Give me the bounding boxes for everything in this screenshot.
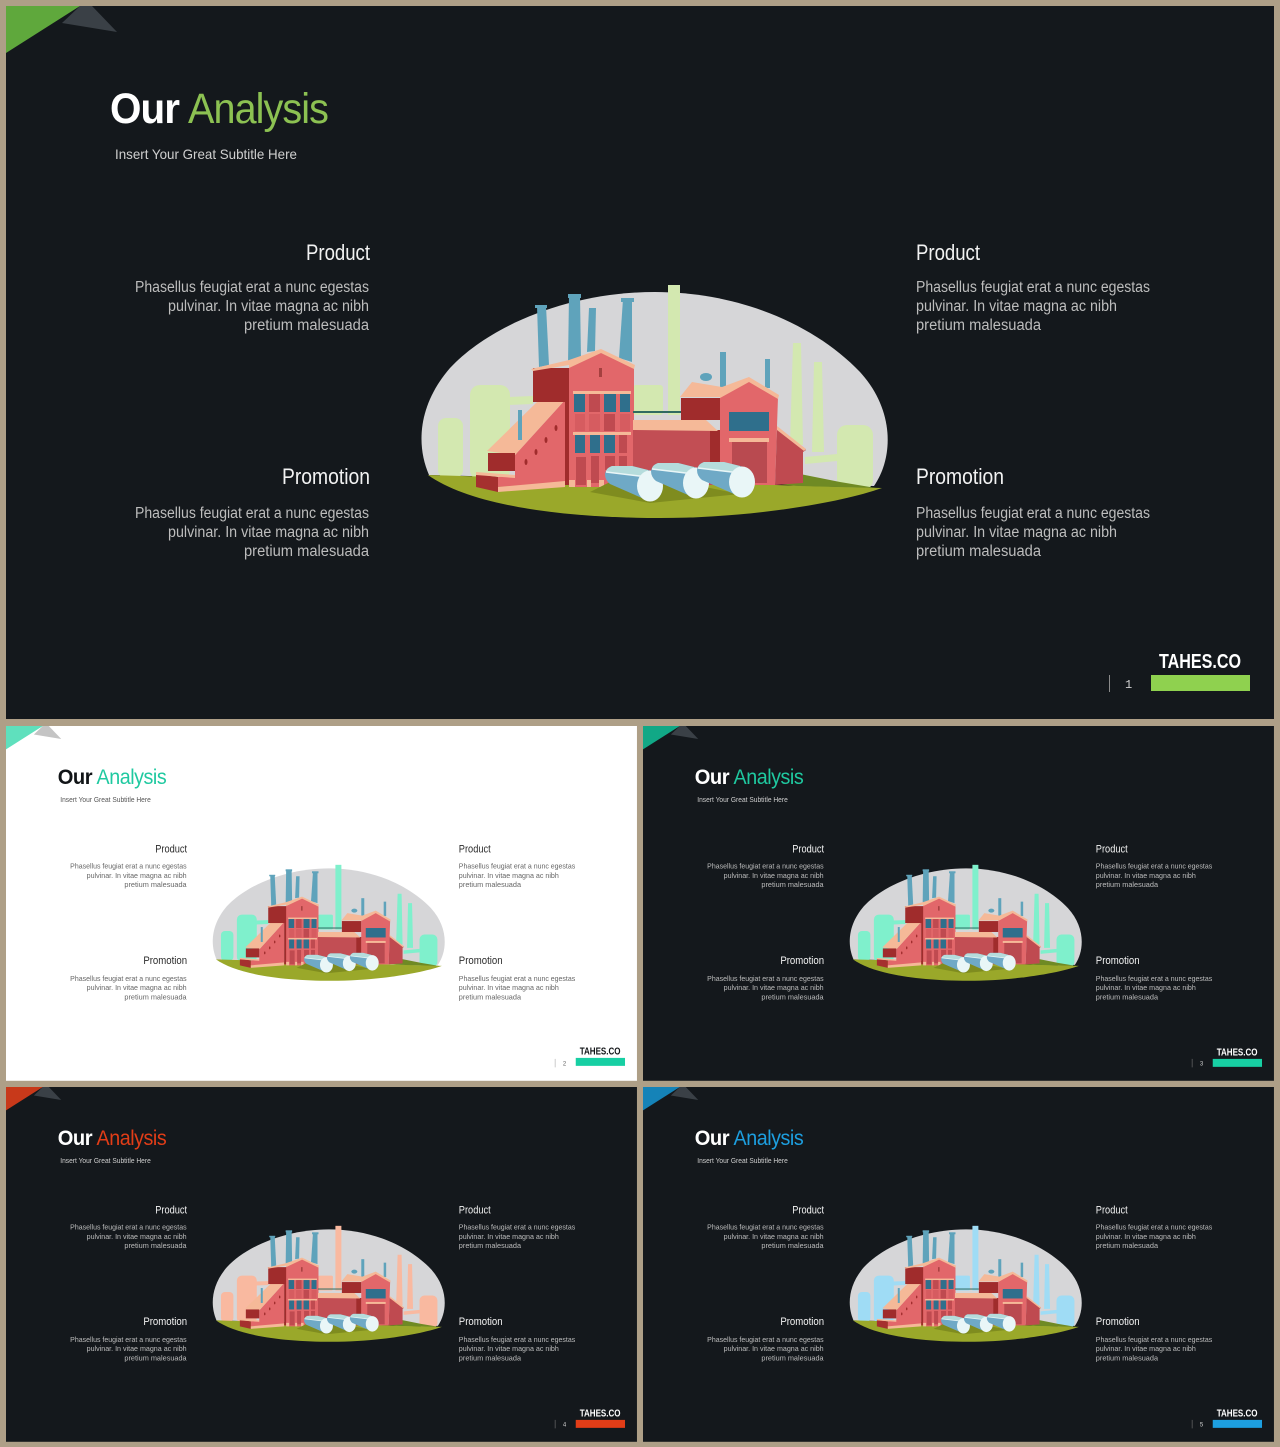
slide 2: small white teal slide [6,726,637,1081]
text block: promotion left: Phasellus feugiat erat a nunc egestas [70,974,187,983]
text block: product left: Product [155,843,187,855]
text block: promotion right [1096,1316,1212,1363]
title: Analysis [97,1126,166,1150]
left wing [476,400,565,492]
text block: promotion left: Phasellus feugiat erat a nunc egestas [135,505,369,522]
footer: divider and page number: 2 [563,1060,567,1067]
footer: divider and page number: 3 [1200,1060,1204,1067]
tanks [590,462,755,503]
text block: product right: Product [1096,843,1128,855]
title: Our [695,1126,729,1150]
footer: divider and page number [1109,675,1132,692]
text block: product right: pretium malesuada [459,1241,522,1250]
text block: promotion left: Promotion [282,464,370,489]
text block: product right [1096,1204,1212,1250]
text block: promotion left: pulvinar. In vitae magna ac nibh [724,983,824,992]
title: Analysis [97,765,166,789]
text block: product left: pretium malesuada [124,880,187,889]
text block: product left [707,1204,824,1250]
footer: accent bar [1213,1059,1262,1067]
background silhouettes [438,285,873,490]
text block: promotion left: pretium malesuada [124,1354,187,1363]
text block: promotion right: Promotion [916,464,1004,489]
text block: product right: Phasellus feugiat erat a nunc egestas [459,1222,575,1231]
text block: promotion right: pulvinar. In vitae magna ac nibh [1096,983,1196,992]
text block: promotion right: Phasellus feugiat erat a nunc egestas [459,974,575,983]
text block: promotion left: Promotion [780,955,824,967]
text block: product left: pulvinar. In vitae magna ac nibh [87,871,187,880]
text block: promotion left: pretium malesuada [124,993,187,1002]
text block: product left: pulvinar. In vitae magna ac nibh [87,1232,187,1241]
text block: product right: pretium malesuada [1096,1241,1159,1250]
footer: accent bar [1213,1420,1262,1428]
text block: product left: pulvinar. In vitae magna ac nibh [724,1232,824,1241]
text block: product right: Phasellus feugiat erat a nunc egestas [1096,1222,1212,1231]
corner triangle: accent [6,726,43,749]
text block: product left: pretium malesuada [761,1241,824,1250]
footer: divider and page number [1192,1420,1204,1428]
slide 5: small dark blue slide [643,1087,1274,1442]
text block: promotion right: Promotion [1096,955,1140,967]
text block: product left [70,1204,187,1250]
slide background [6,726,637,1081]
factory illustration [213,865,445,981]
footer: accent bar [1151,675,1250,691]
text block: product right: Product [459,1204,491,1216]
text block: product left [707,843,824,889]
text block: promotion right: pretium malesuada [1096,1354,1159,1363]
slide 4: small dark red slide [6,1087,637,1442]
subtitle: Insert Your Great Subtitle Here [697,1158,788,1165]
slide background [643,726,1274,1081]
main tower [531,349,635,487]
text block: product left: Phasellus feugiat erat a nunc egestas [135,279,369,296]
chimneys [535,294,770,388]
text block: product right: Phasellus feugiat erat a nunc egestas [916,279,1150,296]
text block: promotion right: pulvinar. In vitae magna ac nibh [916,524,1117,541]
text block: product right: pulvinar. In vitae magna ac nibh [459,1232,559,1241]
text block: promotion right: pretium malesuada [916,543,1041,560]
text block: promotion left: Promotion [143,955,187,967]
text block: promotion left: pulvinar. In vitae magna ac nibh [168,524,369,541]
text block: promotion right: pulvinar. In vitae magna ac nibh [459,1344,559,1353]
text block: promotion right [459,955,575,1002]
text block: product left: pulvinar. In vitae magna ac nibh [724,871,824,880]
footer: divider and page number [1192,1059,1204,1067]
slide background [6,1087,637,1442]
text block: product right [1096,843,1212,889]
text block: promotion left [70,1316,187,1363]
text block: promotion right: pretium malesuada [459,993,522,1002]
text block: product left: Phasellus feugiat erat a nunc egestas [70,1222,187,1231]
text block: promotion right: pretium malesuada [459,1354,522,1363]
text block: product right [459,1204,575,1250]
subtitle: Insert Your Great Subtitle Here [60,797,151,804]
text block: product left: Product [792,843,824,855]
subtitle: Insert Your Great Subtitle Here [697,797,788,804]
grey backdrop [421,292,888,486]
text block: product left: Phasellus feugiat erat a nunc egestas [70,861,187,870]
corner triangle: accent [643,1087,680,1110]
text block: product right: Product [1096,1204,1128,1216]
footer: brand mark: TAHES.CO [1217,1047,1258,1058]
footer: brand mark: TAHES.CO [1217,1408,1258,1419]
text block: product right: Product [459,843,491,855]
text block: promotion left: pulvinar. In vitae magna ac nibh [87,983,187,992]
text block: promotion right: Phasellus feugiat erat a nunc egestas [459,1335,575,1344]
text block: product left: Product [792,1204,824,1216]
subtitle: Insert Your Great Subtitle Here [115,146,297,162]
title: Our [695,765,729,789]
text block: product right: pretium malesuada [916,317,1041,334]
right building [680,373,806,485]
text block: product right: Product [916,240,980,265]
footer: brand mark: TAHES.CO [1159,651,1241,673]
text block: promotion right [916,464,1150,560]
text block: promotion left: Phasellus feugiat erat a nunc egestas [70,1335,187,1344]
text block: promotion left: Phasellus feugiat erat a nunc egestas [707,974,824,983]
text block: promotion right: Phasellus feugiat erat a nunc egestas [1096,974,1212,983]
text block: promotion right: Promotion [1096,1316,1140,1328]
slide 3: small dark teal slide [643,726,1274,1081]
slide background [643,1087,1274,1442]
corner triangle: accent [6,1087,43,1110]
text block: promotion left [707,955,824,1002]
text block: promotion left: Phasellus feugiat erat a nunc egestas [707,1335,824,1344]
text block: product left: pulvinar. In vitae magna ac nibh [168,298,369,315]
text block: product right: pulvinar. In vitae magna ac nibh [1096,1232,1196,1241]
ground [428,475,882,518]
text block: promotion right: pretium malesuada [1096,993,1159,1002]
text block: promotion left [135,464,370,560]
text block: promotion left [70,955,187,1002]
text block: product right: Phasellus feugiat erat a nunc egestas [459,861,575,870]
text block: product left: Phasellus feugiat erat a nunc egestas [707,861,824,870]
text block: product right [459,843,575,889]
title: Analysis [188,85,328,133]
text block: product left [135,240,370,334]
footer: brand mark: TAHES.CO [580,1408,621,1419]
text block: promotion left: Promotion [143,1316,187,1328]
footer: divider and page number [555,1059,567,1067]
footer: divider and page number: 5 [1200,1421,1204,1428]
text block: promotion left: pretium malesuada [761,1354,824,1363]
text block: product right: pulvinar. In vitae magna ac nibh [916,298,1117,315]
text block: product right: pulvinar. In vitae magna ac nibh [1096,871,1196,880]
footer: brand mark: TAHES.CO [580,1046,621,1057]
text block: product right [916,240,1150,334]
text block: product left: pretium malesuada [761,880,824,889]
corner triangle: accent [643,726,680,749]
title: Our [58,765,92,789]
corner triangle: grey [34,726,61,739]
text block: product left: pretium malesuada [124,1241,187,1250]
text block: promotion right [1096,955,1212,1002]
text block: product left: Product [155,1204,187,1216]
footer: accent bar [576,1058,625,1066]
text block: promotion right: pulvinar. In vitae magna ac nibh [1096,1344,1196,1353]
corner triangle: grey [62,6,117,32]
corner triangle: accent [6,6,80,53]
factory illustration [213,1226,445,1342]
centre hall [633,411,720,485]
factory illustration [421,285,888,518]
corner triangle: grey [34,1087,61,1100]
factory illustration [850,865,1082,981]
text block: promotion right: pulvinar. In vitae magna ac nibh [459,983,559,992]
text block: product right: pulvinar. In vitae magna ac nibh [459,871,559,880]
title: Our [110,85,180,133]
text block: product right: Phasellus feugiat erat a nunc egestas [1096,861,1212,870]
corner triangle: grey [671,1087,698,1100]
title: Analysis [734,1126,803,1150]
title: Our [58,1126,92,1150]
text block: promotion left: pulvinar. In vitae magna ac nibh [87,1344,187,1353]
footer: accent bar [576,1420,625,1428]
text block: promotion right: Phasellus feugiat erat a nunc egestas [1096,1335,1212,1344]
footer: divider and page number [555,1420,567,1428]
text block: promotion left: pretium malesuada [761,993,824,1002]
subtitle: Insert Your Great Subtitle Here [60,1158,151,1165]
text block: promotion right [459,1316,575,1363]
footer: divider and page number: 4 [563,1421,567,1428]
text block: promotion right: Promotion [459,955,503,967]
text block: promotion left: pretium malesuada [244,543,369,560]
corner triangle: grey [671,726,698,739]
text block: product right: pretium malesuada [1096,880,1159,889]
factory illustration [850,1226,1082,1342]
text block: product left: Product [306,240,370,265]
ground shadow [775,474,876,488]
text block: promotion right: Phasellus feugiat erat a nunc egestas [916,505,1150,522]
text block: product left [70,843,187,889]
text block: product left: pretium malesuada [244,317,369,334]
text block: product right: pretium malesuada [459,880,522,889]
text block: product left: Phasellus feugiat erat a nunc egestas [707,1222,824,1231]
title: Analysis [734,765,803,789]
slide 1: large dark green slide [6,6,1274,719]
footer: divider and page number: 1 [1125,678,1132,692]
slide background [6,6,1274,719]
text block: promotion right: Promotion [459,1316,503,1328]
text block: promotion left: pulvinar. In vitae magna ac nibh [724,1344,824,1353]
text block: promotion left [707,1316,824,1363]
text block: promotion left: Promotion [780,1316,824,1328]
